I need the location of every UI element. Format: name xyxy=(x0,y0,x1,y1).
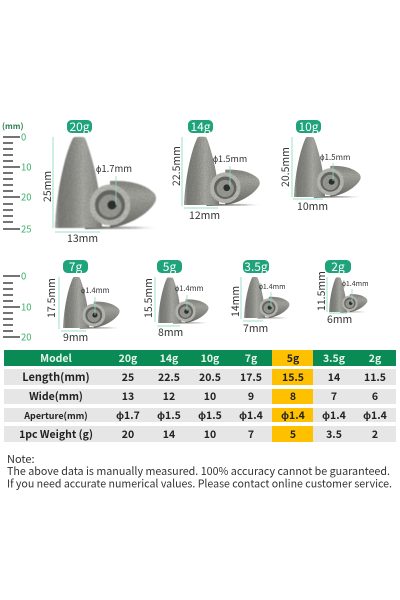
ruler: 0 to 20 mm xyxy=(3,268,32,344)
row: aperture: ϕ1.4 xyxy=(363,408,387,423)
row: weight xyxy=(4,426,396,442)
sinker: 7g: 9mm xyxy=(63,330,88,345)
note: The above data is manually measured. 100% accuracy cannot be guaranteed. xyxy=(7,463,390,479)
sinker: 3.5g: 14mm xyxy=(228,286,243,317)
row: aperture: ϕ1.5 xyxy=(157,408,181,423)
table header row: 3.5g xyxy=(323,351,346,366)
sinker: 20g: ϕ1.7mm xyxy=(96,161,132,175)
row: weight: 3.5 xyxy=(326,427,342,442)
sinker: 20g xyxy=(40,118,157,246)
sinker: 7g: 17.5mm xyxy=(44,278,59,318)
sinker: 14g: 22.5mm xyxy=(169,146,184,186)
row: length: 20.5 xyxy=(199,370,221,385)
sinker: 5g xyxy=(141,258,209,340)
row: weight: 14 xyxy=(163,427,175,442)
row: wide: 8 xyxy=(290,389,296,404)
sinker: 3.5g: ϕ1.4mm xyxy=(259,282,286,292)
sinker: 10g: ϕ1.5mm xyxy=(320,152,350,163)
table header row: 2g xyxy=(369,351,382,366)
row: aperture: Aperture(mm) xyxy=(23,409,88,422)
row: wide: 12 xyxy=(163,389,175,404)
ruler: 0 to 25 mm xyxy=(3,130,32,236)
row: weight: 10 xyxy=(204,427,216,442)
table header row xyxy=(4,350,396,366)
sinker: 5g: ϕ1.4mm xyxy=(175,283,204,294)
table header row: 7g xyxy=(245,351,258,366)
table header row: 10g xyxy=(201,351,220,366)
sinker: 7g: ϕ1.4mm xyxy=(81,285,110,296)
sinker: 5g: 15.5mm xyxy=(141,278,156,318)
row: weight: 5 xyxy=(290,427,296,442)
row: wide: 6 xyxy=(372,389,378,404)
sinker: 10g: 20.5mm xyxy=(278,147,293,187)
sinker: 5g: 5g xyxy=(163,258,176,275)
row: wide: 13 xyxy=(122,389,134,404)
sinker: 14g: 14g xyxy=(190,118,211,135)
sinker: 10g: 10mm xyxy=(297,199,328,214)
sinker: 3.5g: 7mm xyxy=(243,321,268,336)
ruler: 0 to 25 mm: 25 xyxy=(21,222,32,236)
table header row: Model xyxy=(40,351,73,366)
ruler: 0 to 20 mm: 20 xyxy=(21,330,32,344)
row: length: 14 xyxy=(328,370,340,385)
sinker: 20g: 20g xyxy=(69,118,90,135)
sinker: 3.5g xyxy=(228,258,290,336)
sinker: 2g xyxy=(314,258,369,327)
table header row: 5g xyxy=(287,351,300,366)
row: wide: Wide(mm) xyxy=(29,389,83,404)
row: aperture: ϕ1.7 xyxy=(116,408,140,423)
sinker: 20g: 25mm xyxy=(40,171,55,202)
note xyxy=(7,451,392,492)
row: length: 22.5 xyxy=(158,370,180,385)
sinker: 3.5g: 3.5g xyxy=(244,258,268,275)
row: length: 15.5 xyxy=(282,370,304,385)
table header row: 14g xyxy=(160,351,179,366)
specification table xyxy=(4,350,396,442)
sinker: 10g xyxy=(278,118,361,214)
row: aperture: ϕ1.4 xyxy=(322,408,346,423)
row: length: 11.5 xyxy=(364,370,386,385)
row: weight: 20 xyxy=(122,427,134,442)
ruler: 0 to 20 mm: 10 xyxy=(21,300,32,314)
row: length xyxy=(4,369,396,385)
row: aperture: ϕ1.5 xyxy=(198,408,222,423)
table header row: 20g xyxy=(119,351,138,366)
ruler: 0 to 25 mm: 10 xyxy=(21,160,32,174)
ruler: 0 to 20 mm: 0 xyxy=(21,268,26,282)
sinker: 5g: 8mm xyxy=(158,325,183,340)
sinker: 2g: 11.5mm xyxy=(314,271,329,311)
row: length: 17.5 xyxy=(240,370,262,385)
sinker: 20g: 13mm xyxy=(67,231,98,246)
row: wide: 9 xyxy=(248,389,254,404)
sinker: 2g: 6mm xyxy=(327,312,352,327)
row: aperture: ϕ1.4 xyxy=(239,408,263,423)
ruler: 0 to 25 mm: 0 xyxy=(21,130,26,144)
row: weight: 2 xyxy=(372,427,378,442)
row: wide: 7 xyxy=(331,389,337,404)
unit label: (mm) xyxy=(2,121,23,132)
row: aperture: ϕ1.4 xyxy=(281,408,305,423)
sinker: 2g: 2g xyxy=(331,258,345,275)
sinker: 14g: ϕ1.5mm xyxy=(213,152,247,165)
note: If you need accurate numerical values. Please contact online customer service. xyxy=(7,476,392,492)
ruler: 0 to 25 mm: 20 xyxy=(21,190,32,204)
note: Note: xyxy=(7,451,35,467)
sinker: 7g xyxy=(44,258,120,345)
row: weight: 7 xyxy=(248,427,254,442)
sinker: 14g xyxy=(169,118,260,223)
row: length: 25 xyxy=(122,370,134,385)
sinker: 10g: 10g xyxy=(298,118,319,135)
row: wide xyxy=(4,389,396,404)
row: wide: 10 xyxy=(204,389,216,404)
row: aperture xyxy=(4,408,396,423)
row: weight: 1pc Weight (g) xyxy=(19,427,93,442)
row: length: Length(mm) xyxy=(22,369,90,385)
sinker: 2g: ϕ1.4mm xyxy=(342,279,369,289)
sinker: 7g: 7g xyxy=(69,258,82,275)
sinker: 14g: 12mm xyxy=(189,208,220,223)
